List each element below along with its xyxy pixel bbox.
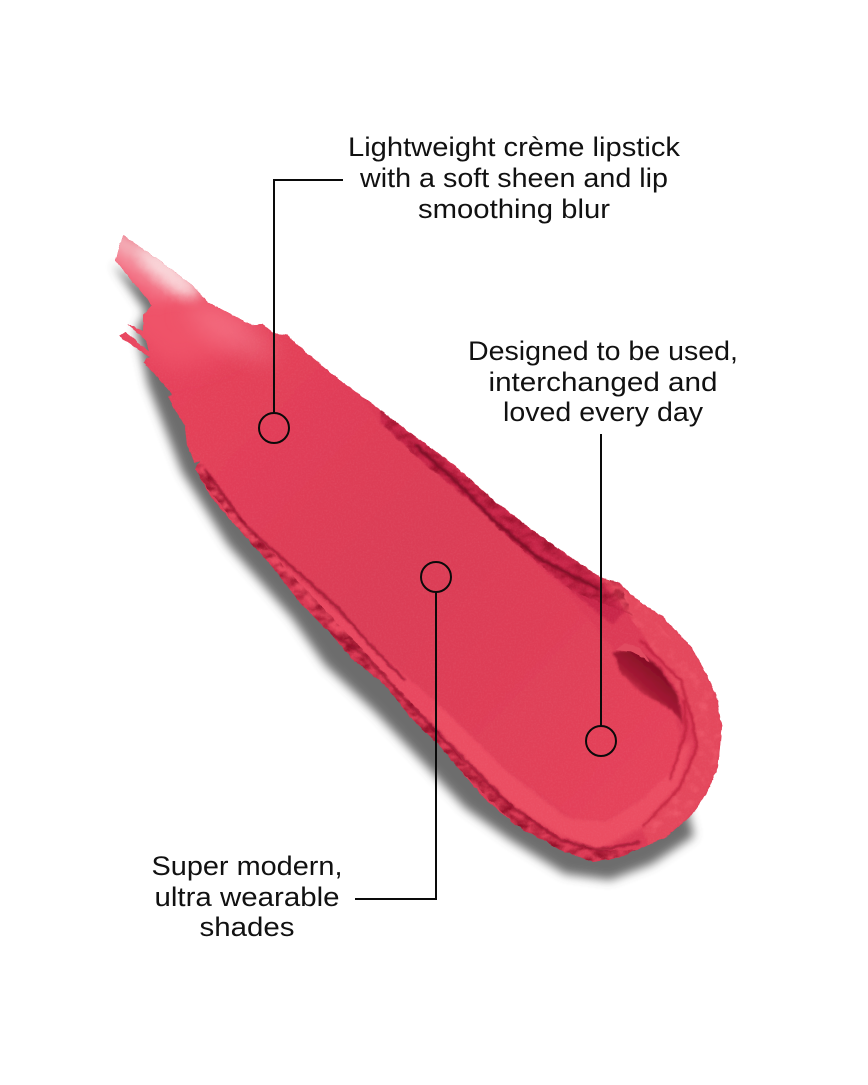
flat inner colour and tip <box>100 225 680 820</box>
rim light texture <box>604 580 721 828</box>
callout text <box>468 336 738 427</box>
swatch base <box>100 220 740 880</box>
callout text <box>152 851 342 942</box>
infographic canvas <box>111 136 736 936</box>
cavity shadow <box>613 650 684 725</box>
callout: designed <box>468 336 738 756</box>
callout text: ultra wearable <box>154 882 340 912</box>
tip pale sheen <box>134 245 202 303</box>
swatch shadow <box>113 264 694 880</box>
callout: lightweight <box>259 132 681 443</box>
callout text: Lightweight crème lipstick <box>348 132 681 162</box>
callout: shades <box>152 562 451 942</box>
callout text: Super modern, <box>152 851 342 881</box>
callout text <box>348 132 681 224</box>
callout text: interchanged and <box>488 367 718 397</box>
soft sheen <box>190 302 277 366</box>
leader line and marker <box>355 562 451 899</box>
tip pink wash <box>115 236 242 369</box>
leader line and marker <box>259 180 343 443</box>
top rim dark band <box>380 410 625 625</box>
right rim colour <box>600 570 722 846</box>
callout text: smoothing blur <box>418 194 610 224</box>
tip gradient <box>115 235 205 304</box>
lower-left pale rim <box>200 463 440 722</box>
surface grain <box>168 341 698 858</box>
callout text: loved every day <box>503 397 704 427</box>
callout text: shades <box>200 912 294 942</box>
lower pale rim <box>430 706 691 848</box>
callout text: Designed to be used, <box>468 336 738 366</box>
right fold lines <box>640 640 697 827</box>
lower crack lines <box>205 470 640 850</box>
callout text: with a soft sheen and lip <box>359 163 668 193</box>
top fold dark line <box>415 445 600 590</box>
lipstick swatch <box>100 220 740 880</box>
rim dark texture: bottom <box>190 460 660 862</box>
leader line and marker <box>586 434 616 756</box>
raised blob <box>616 643 650 662</box>
rim dark texture: top <box>380 410 632 615</box>
